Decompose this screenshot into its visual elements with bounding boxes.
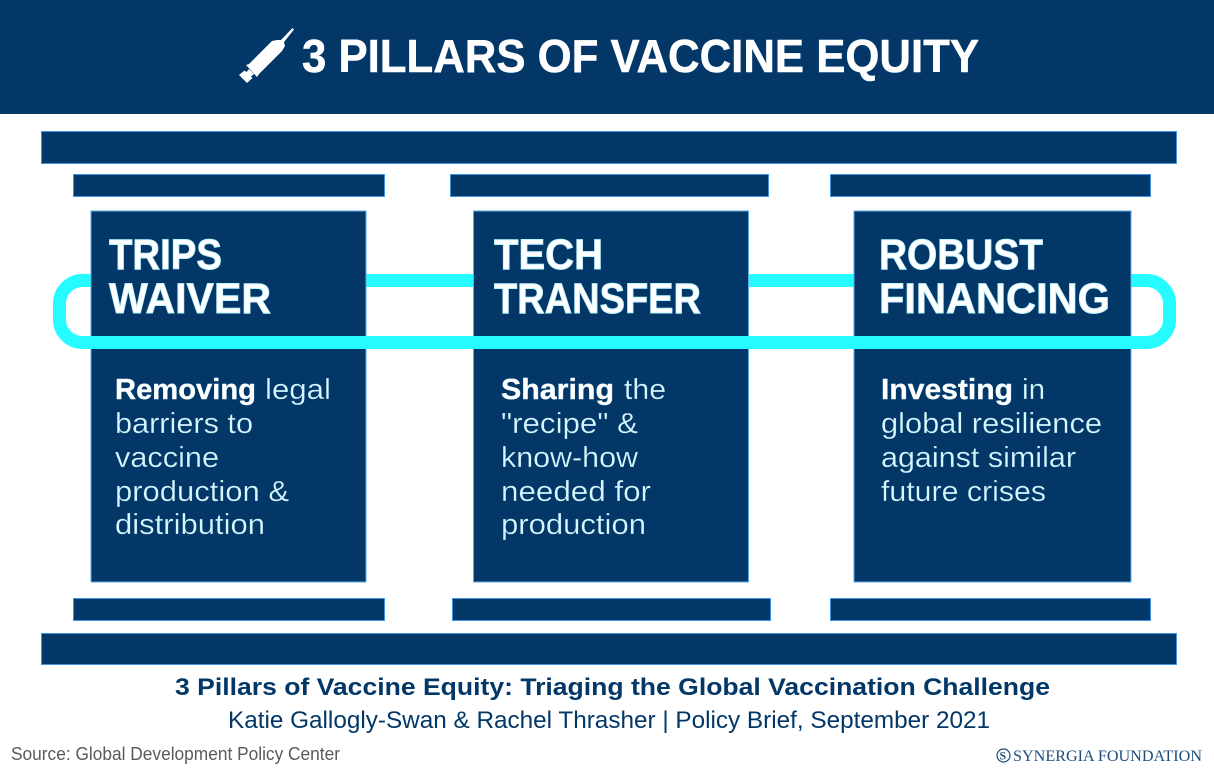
- heading: ROBUST: [879, 231, 1043, 279]
- description: Investing: [881, 374, 1013, 406]
- panel: tech transfer: [472, 211, 750, 582]
- logo: Synergia Foundation: SYNERGIA FOUNDATION: [1013, 748, 1202, 765]
- description: needed for: [501, 476, 651, 508]
- top beam: [42, 132, 1176, 164]
- logo: Synergia Foundation: S: [1000, 748, 1006, 762]
- icon: syringe: [239, 28, 294, 83]
- description: in: [1022, 374, 1045, 406]
- description: global resilience: [881, 408, 1102, 440]
- description: production: [501, 509, 646, 541]
- bottom caps: [74, 598, 1150, 620]
- description: the: [624, 374, 666, 406]
- description: barriers to: [115, 408, 253, 440]
- description: [115, 374, 331, 541]
- panel: TRIPS waiver: [90, 211, 367, 582]
- heading: [879, 231, 1110, 323]
- panel: robust financing: [853, 211, 1132, 582]
- description: vaccine: [115, 442, 219, 474]
- description: against similar: [881, 442, 1076, 474]
- description: production &: [115, 476, 289, 508]
- heading: TRANSFER: [494, 275, 701, 323]
- top caps: [74, 174, 1150, 196]
- description: [501, 374, 666, 541]
- description: distribution: [115, 509, 265, 541]
- description: Removing: [115, 374, 256, 406]
- header band: [0, 0, 1214, 114]
- title: 3 PILLARS OF VACCINE EQUITY: [302, 30, 979, 82]
- description: know-how: [501, 442, 639, 474]
- description: legal: [265, 374, 331, 406]
- description: "recipe" &: [501, 408, 638, 440]
- description: future crises: [881, 476, 1046, 508]
- heading: [109, 231, 271, 323]
- cyan ring: [60, 280, 1170, 342]
- heading: [494, 231, 701, 323]
- report authors: Katie Gallogly-Swan & Rachel Thrasher | Policy Brief, September 2021: [228, 707, 990, 734]
- description: [881, 374, 1102, 508]
- heading: TRIPS: [109, 231, 222, 279]
- source: Source: Global Development Policy Center: [11, 744, 340, 764]
- bottom beam: [42, 634, 1176, 664]
- heading: WAIVER: [109, 275, 271, 323]
- report title: 3 Pillars of Vaccine Equity: Triaging the Global Vaccination Challenge: [175, 674, 1050, 701]
- description: Sharing: [501, 374, 614, 406]
- heading: TECH: [494, 231, 603, 279]
- heading: FINANCING: [879, 275, 1110, 323]
